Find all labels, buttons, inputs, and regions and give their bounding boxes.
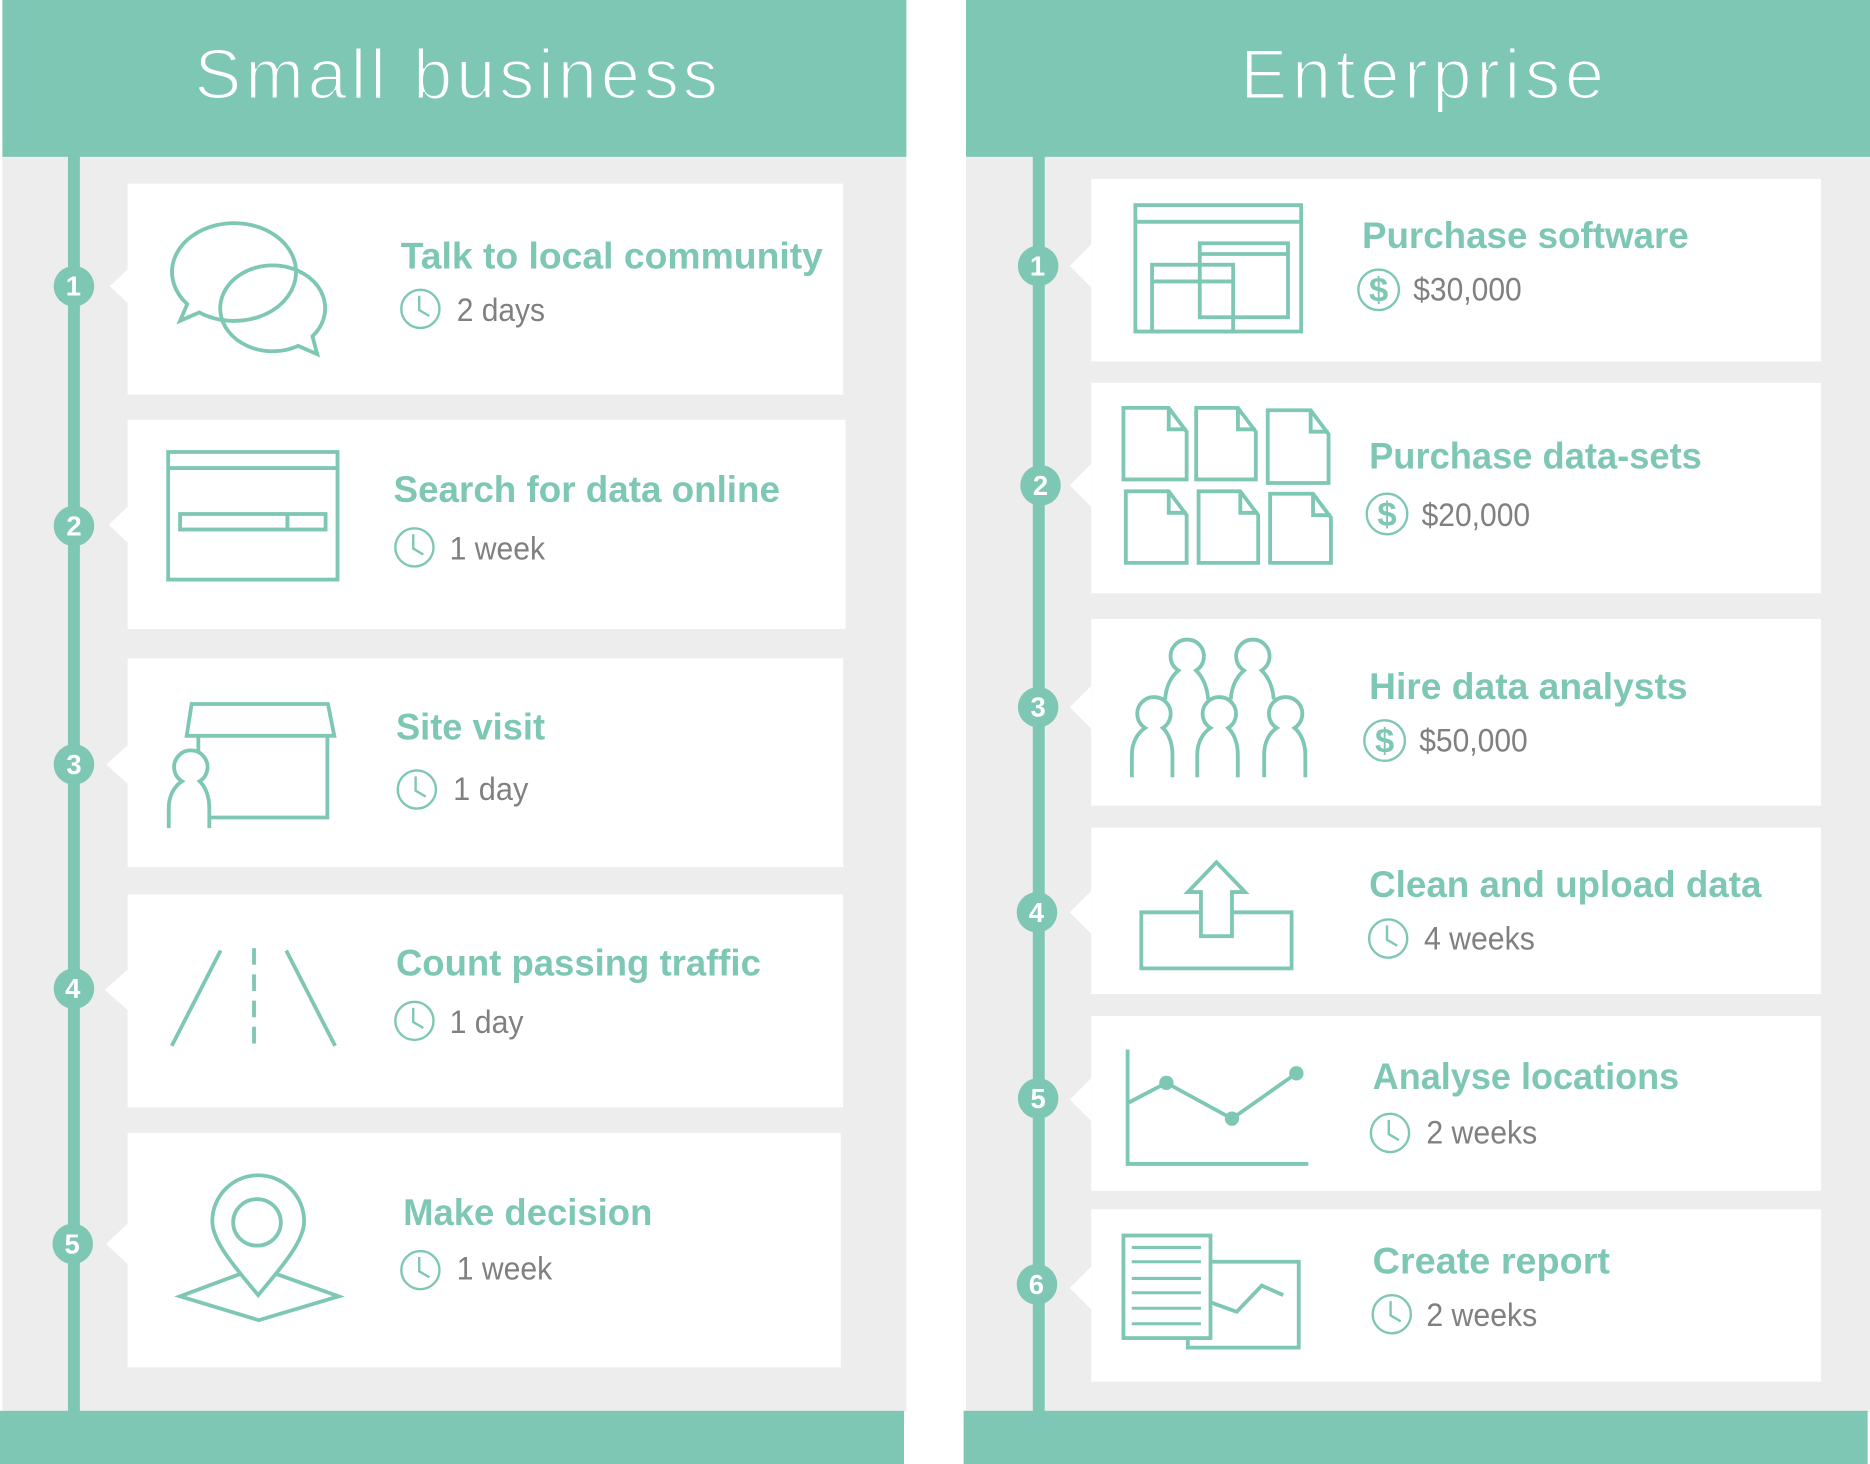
icon: browser search bbox=[168, 452, 338, 580]
header: small business bbox=[2, 0, 906, 157]
step 3: hire data analysts: $50,000 bbox=[1419, 722, 1528, 758]
icon: dollar bbox=[1364, 720, 1405, 761]
step 5: analyse locations: 2 weeks bbox=[1426, 1115, 1537, 1151]
step 3: hire data analysts: 3 bbox=[1031, 692, 1046, 723]
icon: documents bbox=[1123, 408, 1331, 563]
step 5: analyse locations: 5 bbox=[1031, 1083, 1046, 1114]
panel: enterprise bbox=[964, 0, 1870, 1464]
step 4: count passing traffic bbox=[54, 894, 843, 1107]
icon: clock bbox=[395, 528, 434, 566]
timeline spine bbox=[1033, 156, 1045, 1412]
step 4: count passing traffic: Count passing traffic bbox=[396, 943, 761, 984]
footer bar bbox=[0, 1411, 904, 1464]
step 4: count passing traffic: 4 bbox=[65, 973, 81, 1004]
step 5: analyse locations bbox=[1018, 1016, 1821, 1191]
step 4: clean and upload data: Clean and upload data bbox=[1369, 864, 1762, 905]
step 3: site visit: 3 bbox=[66, 749, 82, 780]
icon: clock bbox=[395, 1002, 434, 1040]
icon: software windows bbox=[1135, 205, 1301, 332]
step 3: site visit bbox=[54, 658, 843, 867]
step 1: talk to local community: 1 bbox=[66, 271, 81, 302]
step 6: create report bbox=[1017, 1209, 1821, 1382]
step 4: clean and upload data: 4 weeks bbox=[1424, 920, 1535, 956]
step 6: create report: 2 weeks bbox=[1426, 1297, 1537, 1333]
icon: line chart bbox=[1128, 1049, 1308, 1164]
step 2: purchase data-sets: Purchase data-sets bbox=[1369, 436, 1702, 477]
step 1: talk to local community: 2 days bbox=[457, 292, 545, 328]
icon: upload bbox=[1141, 862, 1292, 968]
icon: clock bbox=[1369, 919, 1407, 958]
icon: clock bbox=[1371, 1114, 1409, 1152]
panel: small business bbox=[0, 0, 906, 1464]
step 5: analyse locations: Analyse locations bbox=[1373, 1056, 1679, 1097]
header: enterprise bbox=[966, 0, 1870, 157]
step 5: make decision: Make decision bbox=[403, 1192, 652, 1233]
step 2: search for data online: 1 week bbox=[450, 530, 546, 566]
step 4: clean and upload data bbox=[1017, 828, 1821, 994]
step 3: hire data analysts: Hire data analysts bbox=[1369, 666, 1688, 707]
header: small business: Small business bbox=[194, 34, 718, 113]
icon: clock bbox=[398, 770, 436, 809]
footer bar bbox=[964, 1411, 1868, 1464]
icon: clock bbox=[401, 1251, 439, 1289]
icon: shop and person bbox=[169, 704, 334, 828]
icon: dollar bbox=[1358, 270, 1399, 310]
step 2: search for data online: 2 bbox=[66, 510, 82, 541]
step 2: search for data online bbox=[54, 420, 846, 629]
icon: dollar: $ bbox=[1375, 723, 1394, 761]
header: enterprise: Enterprise bbox=[1240, 34, 1604, 113]
icon: road bbox=[172, 948, 335, 1046]
step 2: purchase data-sets bbox=[1020, 383, 1821, 593]
step 5: make decision: 5 bbox=[65, 1228, 80, 1259]
icon: clock bbox=[401, 290, 439, 328]
step 6: create report: 6 bbox=[1029, 1269, 1044, 1300]
icon: speech bubbles bbox=[172, 223, 325, 354]
step 4: clean and upload data: 4 bbox=[1029, 897, 1045, 928]
step 1: purchase software: 1 bbox=[1030, 250, 1045, 281]
step 1: talk to local community: Talk to local community bbox=[401, 235, 823, 276]
icon: dollar bbox=[1367, 494, 1407, 534]
icon: clock bbox=[1373, 1295, 1411, 1333]
step 4: count passing traffic: 1 day bbox=[450, 1004, 524, 1040]
step 1: purchase software bbox=[1018, 179, 1821, 361]
step 5: make decision: 1 week bbox=[457, 1251, 553, 1287]
step 2: purchase data-sets: 2 bbox=[1033, 470, 1048, 501]
icon: team of people bbox=[1132, 640, 1305, 777]
icon: dollar: $ bbox=[1377, 496, 1397, 534]
step 6: create report: Create report bbox=[1373, 1241, 1610, 1282]
step 3: site visit: Site visit bbox=[396, 706, 545, 747]
step 1: talk to local community bbox=[54, 184, 843, 395]
icon: report bbox=[1123, 1236, 1299, 1348]
timeline spine bbox=[68, 156, 80, 1412]
step 2: search for data online: Search for data online bbox=[394, 469, 780, 510]
step 1: purchase software: Purchase software bbox=[1362, 215, 1689, 256]
step 2: purchase data-sets: $20,000 bbox=[1422, 497, 1530, 533]
step 5: make decision bbox=[52, 1133, 841, 1367]
step 3: hire data analysts bbox=[1018, 619, 1821, 806]
icon: dollar: $ bbox=[1369, 272, 1388, 310]
step 1: purchase software: $30,000 bbox=[1413, 272, 1522, 308]
step 3: site visit: 1 day bbox=[453, 771, 529, 807]
icon: map pin bbox=[180, 1175, 339, 1320]
